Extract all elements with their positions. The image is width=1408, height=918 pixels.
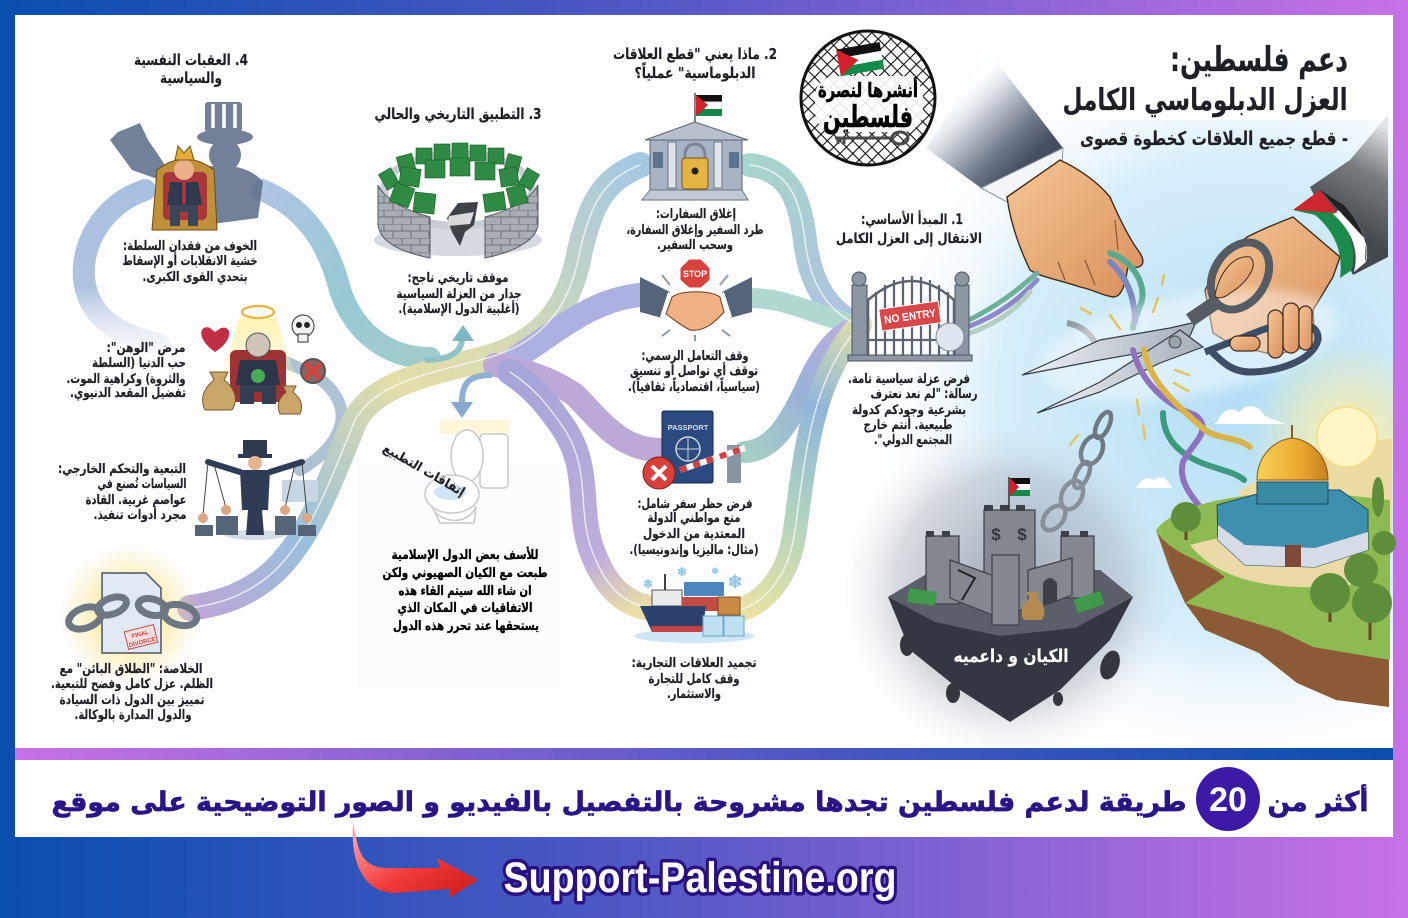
broken heart bbox=[201, 327, 229, 352]
cliff bbox=[1156, 530, 1389, 707]
stream: embassy right bbox=[750, 165, 860, 325]
money bags bbox=[203, 372, 302, 414]
section 4: psychological and political causes: تمييز بين الدول ذات السيادة bbox=[60, 693, 204, 708]
money bag bbox=[1022, 592, 1044, 620]
icon: locked embassy bbox=[642, 93, 748, 200]
icon: toilet bbox=[425, 420, 510, 523]
clouds bbox=[1136, 406, 1285, 488]
arrow down to toilet bbox=[451, 375, 492, 418]
illustration: cables below scissors bbox=[1133, 350, 1250, 513]
icon: wall ring with flags bbox=[374, 143, 542, 258]
arrow up to section 3 bbox=[425, 325, 474, 360]
icon: passport and barrier bbox=[643, 411, 745, 489]
section 2: cutting relations: (سياسياً، اقتصادياً، ثقافياً). bbox=[628, 377, 760, 395]
text: stop official dealing: وقف التعامل الرسمي: bbox=[642, 349, 748, 364]
key in badge bbox=[835, 132, 908, 144]
text: conclusion: الخلاصة: "الطلاق البائن" مع bbox=[60, 662, 202, 677]
badge: number 20: 20 bbox=[1209, 781, 1247, 819]
text: freeze trade: تجميد العلاقات التجارية: bbox=[632, 656, 756, 671]
final divorce stamp bbox=[124, 625, 158, 649]
text: travel ban: فرض حظر سفر شامل: bbox=[638, 497, 752, 512]
skull bbox=[292, 315, 314, 342]
icon: closed gate no entry bbox=[848, 272, 972, 361]
section 4: psychological and political causes: حب الدنيا (السلطة bbox=[92, 356, 186, 371]
flag in badge bbox=[836, 42, 884, 76]
snowflakes bbox=[643, 565, 743, 592]
icon: stop sign and handshake: STOP bbox=[683, 269, 707, 279]
flow streams network bbox=[84, 165, 860, 610]
snowflakes: ❄ bbox=[643, 577, 653, 591]
trees bbox=[1186, 525, 1370, 640]
final divorce stamp: DIVORCE bbox=[128, 637, 156, 649]
section 2: cutting relations bbox=[613, 45, 777, 702]
blades bbox=[1022, 322, 1196, 375]
stream: loop left around section 4 bbox=[84, 190, 160, 345]
illustration: broken chain bbox=[1038, 410, 1114, 535]
section 4: psychological and political causes: والدول المدارة بالوكالة. bbox=[74, 708, 192, 723]
heading: 1. المبدأ الأساسي: bbox=[861, 210, 963, 228]
section 2: cutting relations: الدبلوماسية" عملياً؟ bbox=[634, 62, 756, 82]
drum bbox=[1257, 482, 1328, 504]
section 2: cutting relations: (مثال: ماليزيا وإندونيسيا). bbox=[630, 543, 758, 558]
section 4: psychological and political causes: بتحدي القوى الكبرى. bbox=[142, 270, 248, 285]
section 3: historic application: جدار من العزلة السياسية bbox=[396, 287, 522, 302]
logo badge: keffiyeh circle bbox=[801, 31, 935, 165]
section 3: historic application bbox=[374, 105, 542, 317]
icon: puppet master bbox=[195, 440, 318, 540]
section 4: psychological and political causes bbox=[51, 51, 325, 723]
icon: shadow figure over throne bbox=[110, 102, 263, 230]
heading: 4. العقبات النفسية bbox=[134, 51, 248, 69]
snowflakes: ❄ bbox=[677, 565, 687, 579]
illustration: scissors bbox=[1022, 232, 1346, 420]
section 2: cutting relations: وسحب السفير. bbox=[657, 238, 733, 253]
icon: broken chain on document bbox=[60, 545, 200, 685]
lower handle ring bbox=[1205, 323, 1318, 372]
normalization note with toilet bbox=[381, 420, 548, 634]
illustration: sparks bbox=[1070, 275, 1189, 445]
stream: passport left bbox=[495, 365, 660, 450]
body text: فرض عزلة سياسية تامة. bbox=[848, 372, 970, 387]
section 1: principle: المجتمع الدولي". bbox=[874, 433, 952, 448]
section 1: principle bbox=[836, 210, 982, 448]
banner text right: أكثر من bbox=[1268, 784, 1368, 818]
rotated label: إتفاقات التطبيع bbox=[381, 440, 468, 499]
illustration: right hand with flag cuff bbox=[1205, 115, 1388, 355]
section 4: psychological and political causes: عواصم غربية. القادة bbox=[86, 493, 186, 508]
mosque walls bbox=[1217, 490, 1368, 567]
castle towers bbox=[926, 510, 1094, 625]
section 4: psychological and political causes: السياسات تُصنع في bbox=[98, 477, 186, 492]
hills bbox=[1240, 438, 1392, 540]
thumb bbox=[1215, 257, 1253, 298]
upper handle ring bbox=[1199, 232, 1281, 320]
island label: الكيان و داعميه bbox=[954, 646, 1068, 667]
crossed circle bbox=[301, 359, 325, 383]
text: dependence: التبعية والتحكم الخارجي: bbox=[58, 462, 186, 477]
icon: halo figure with money bbox=[201, 306, 325, 414]
text: disease of wahn: مرض "الوهن": bbox=[106, 341, 186, 356]
website link text: Support-Palestine.org bbox=[504, 854, 896, 902]
falling rocks bbox=[900, 634, 1124, 706]
subtitle: - قطع جميع العلاقات كخطوة قصوى bbox=[1080, 128, 1348, 150]
stream: dependence branch bbox=[285, 362, 342, 470]
illustration: cables held by hand bbox=[1110, 253, 1143, 328]
illustration: left hand with sleeve bbox=[926, 52, 1143, 297]
illustration: Al-Aqsa island bbox=[1156, 407, 1396, 707]
stream: passport right bbox=[745, 325, 860, 452]
normalization note with toilet: ان شاء الله سيتم القاء هذه bbox=[398, 584, 532, 599]
heading: 2. ماذا يعني "قطع العلاقات bbox=[613, 45, 777, 63]
stream: loop right to historic section bbox=[262, 190, 430, 358]
section 4: psychological and political causes: تفضيل المقعد الدنيوي. bbox=[70, 386, 186, 401]
section 2: cutting relations: منع مواطني الدولة bbox=[648, 511, 740, 526]
fingers bbox=[1230, 303, 1312, 358]
badge text bottom: فلسطين bbox=[823, 100, 913, 135]
body text: موقف تاريخي ناجح: bbox=[408, 271, 508, 286]
sun bbox=[1317, 407, 1377, 467]
snowflakes: ❄ bbox=[727, 572, 743, 592]
stream: handshake right bbox=[750, 298, 860, 325]
heading: 3. التطبيق التاريخي والحالي bbox=[374, 105, 542, 123]
flag cuff bbox=[1293, 190, 1367, 278]
title line 1: دعم فلسطين: bbox=[1170, 40, 1348, 80]
golden dome bbox=[1257, 438, 1328, 480]
arrow: red pointing to website bbox=[353, 822, 478, 898]
text: fear of losing power: الخوف من فقدان السلطة: bbox=[123, 239, 257, 254]
gradient divider strip bbox=[15, 748, 1393, 760]
badge text top: أنشرها لنصرة bbox=[818, 76, 918, 102]
footer banner bbox=[15, 760, 1393, 837]
section 1: principle: طبيعية. أنتم خارج bbox=[864, 416, 952, 433]
money on rock bbox=[907, 588, 1104, 613]
section 2: cutting relations: طرد السفير وإغلاق السفارة، bbox=[626, 223, 764, 238]
grass bbox=[1156, 490, 1390, 660]
icon: frozen cargo ship bbox=[634, 565, 754, 643]
final divorce stamp: FINAL bbox=[131, 630, 150, 640]
section 1: principle: رسالة: "لم نعد نعترف bbox=[870, 387, 978, 402]
section 4: psychological and political causes: والسياسية bbox=[160, 69, 222, 87]
white patch behind normalization note bbox=[358, 462, 560, 692]
rock bbox=[888, 570, 1133, 722]
snowflakes: ❄ bbox=[711, 566, 719, 576]
banner text main: طريقة لدعم فلسطين تجدها مشروحة بالتفصيل بالفيديو و الصور التوضيحية على موقع bbox=[52, 787, 1186, 818]
map in center of ring bbox=[447, 202, 478, 246]
dollar signs on tower: $ bbox=[1017, 525, 1027, 544]
no entry sign: NO ENTRY bbox=[884, 307, 937, 327]
stream: ship right bbox=[740, 325, 860, 610]
section 2: cutting relations: وقف كامل للتجارة bbox=[648, 672, 740, 687]
stream: embassy to chain S curve bbox=[190, 165, 640, 608]
normalization note with toilet: طبعت مع الكيان الصهيوني ولكن bbox=[382, 566, 548, 581]
icon: stop sign and handshake bbox=[640, 259, 752, 341]
badge: number 20 bbox=[1196, 767, 1260, 831]
note text: للأسف بعض الدول الإسلامية bbox=[392, 546, 538, 563]
title block bbox=[1062, 40, 1348, 150]
section 4: psychological and political causes: مجرد أدوات تنفيذ. bbox=[94, 506, 186, 523]
illustration: cut cable stump bbox=[1067, 323, 1097, 350]
normalization note with toilet: الاتفاقيات في المكان الذي bbox=[398, 601, 532, 616]
section 2: cutting relations: المعتدية من الدخول bbox=[643, 527, 745, 542]
illustration: dark fortress island bbox=[845, 425, 1175, 755]
flag on fortress bbox=[1009, 477, 1030, 510]
path bbox=[1190, 535, 1375, 587]
section 4: psychological and political causes: والثروة) وكراهية الموت. bbox=[66, 372, 186, 387]
section 4: psychological and political causes: خشية الانقلابات أو الإسقاط bbox=[122, 252, 258, 269]
dollar signs on tower bbox=[991, 525, 1027, 544]
illustration: cables to gate bbox=[965, 273, 1037, 334]
section 1: principle: بشرعية وجودكم كدولة bbox=[852, 403, 966, 418]
section 2: cutting relations: توقف أي تواصل أو تنسيق bbox=[630, 362, 758, 379]
text: close embassies: إغلاق السفارات: bbox=[656, 207, 736, 222]
section 1: principle: الانتقال إلى العزل الكامل bbox=[836, 231, 982, 247]
stream: ship left bbox=[510, 372, 645, 607]
stream: handshake left bbox=[505, 295, 640, 365]
section 3: historic application: (أغلبية الدول الإسلامية). bbox=[398, 300, 520, 317]
normalization note with toilet: يستحقها عند تحرر هذه الدول bbox=[393, 619, 539, 634]
icon: passport and barrier: PASSPORT bbox=[668, 423, 709, 432]
section 4: psychological and political causes: الظلم. عزل كامل وفضح للتبعية. bbox=[51, 677, 213, 692]
dollar signs on tower: $ bbox=[991, 525, 1001, 544]
main white panel bbox=[15, 15, 1393, 748]
section 2: cutting relations: والاستثمار. bbox=[667, 687, 721, 702]
